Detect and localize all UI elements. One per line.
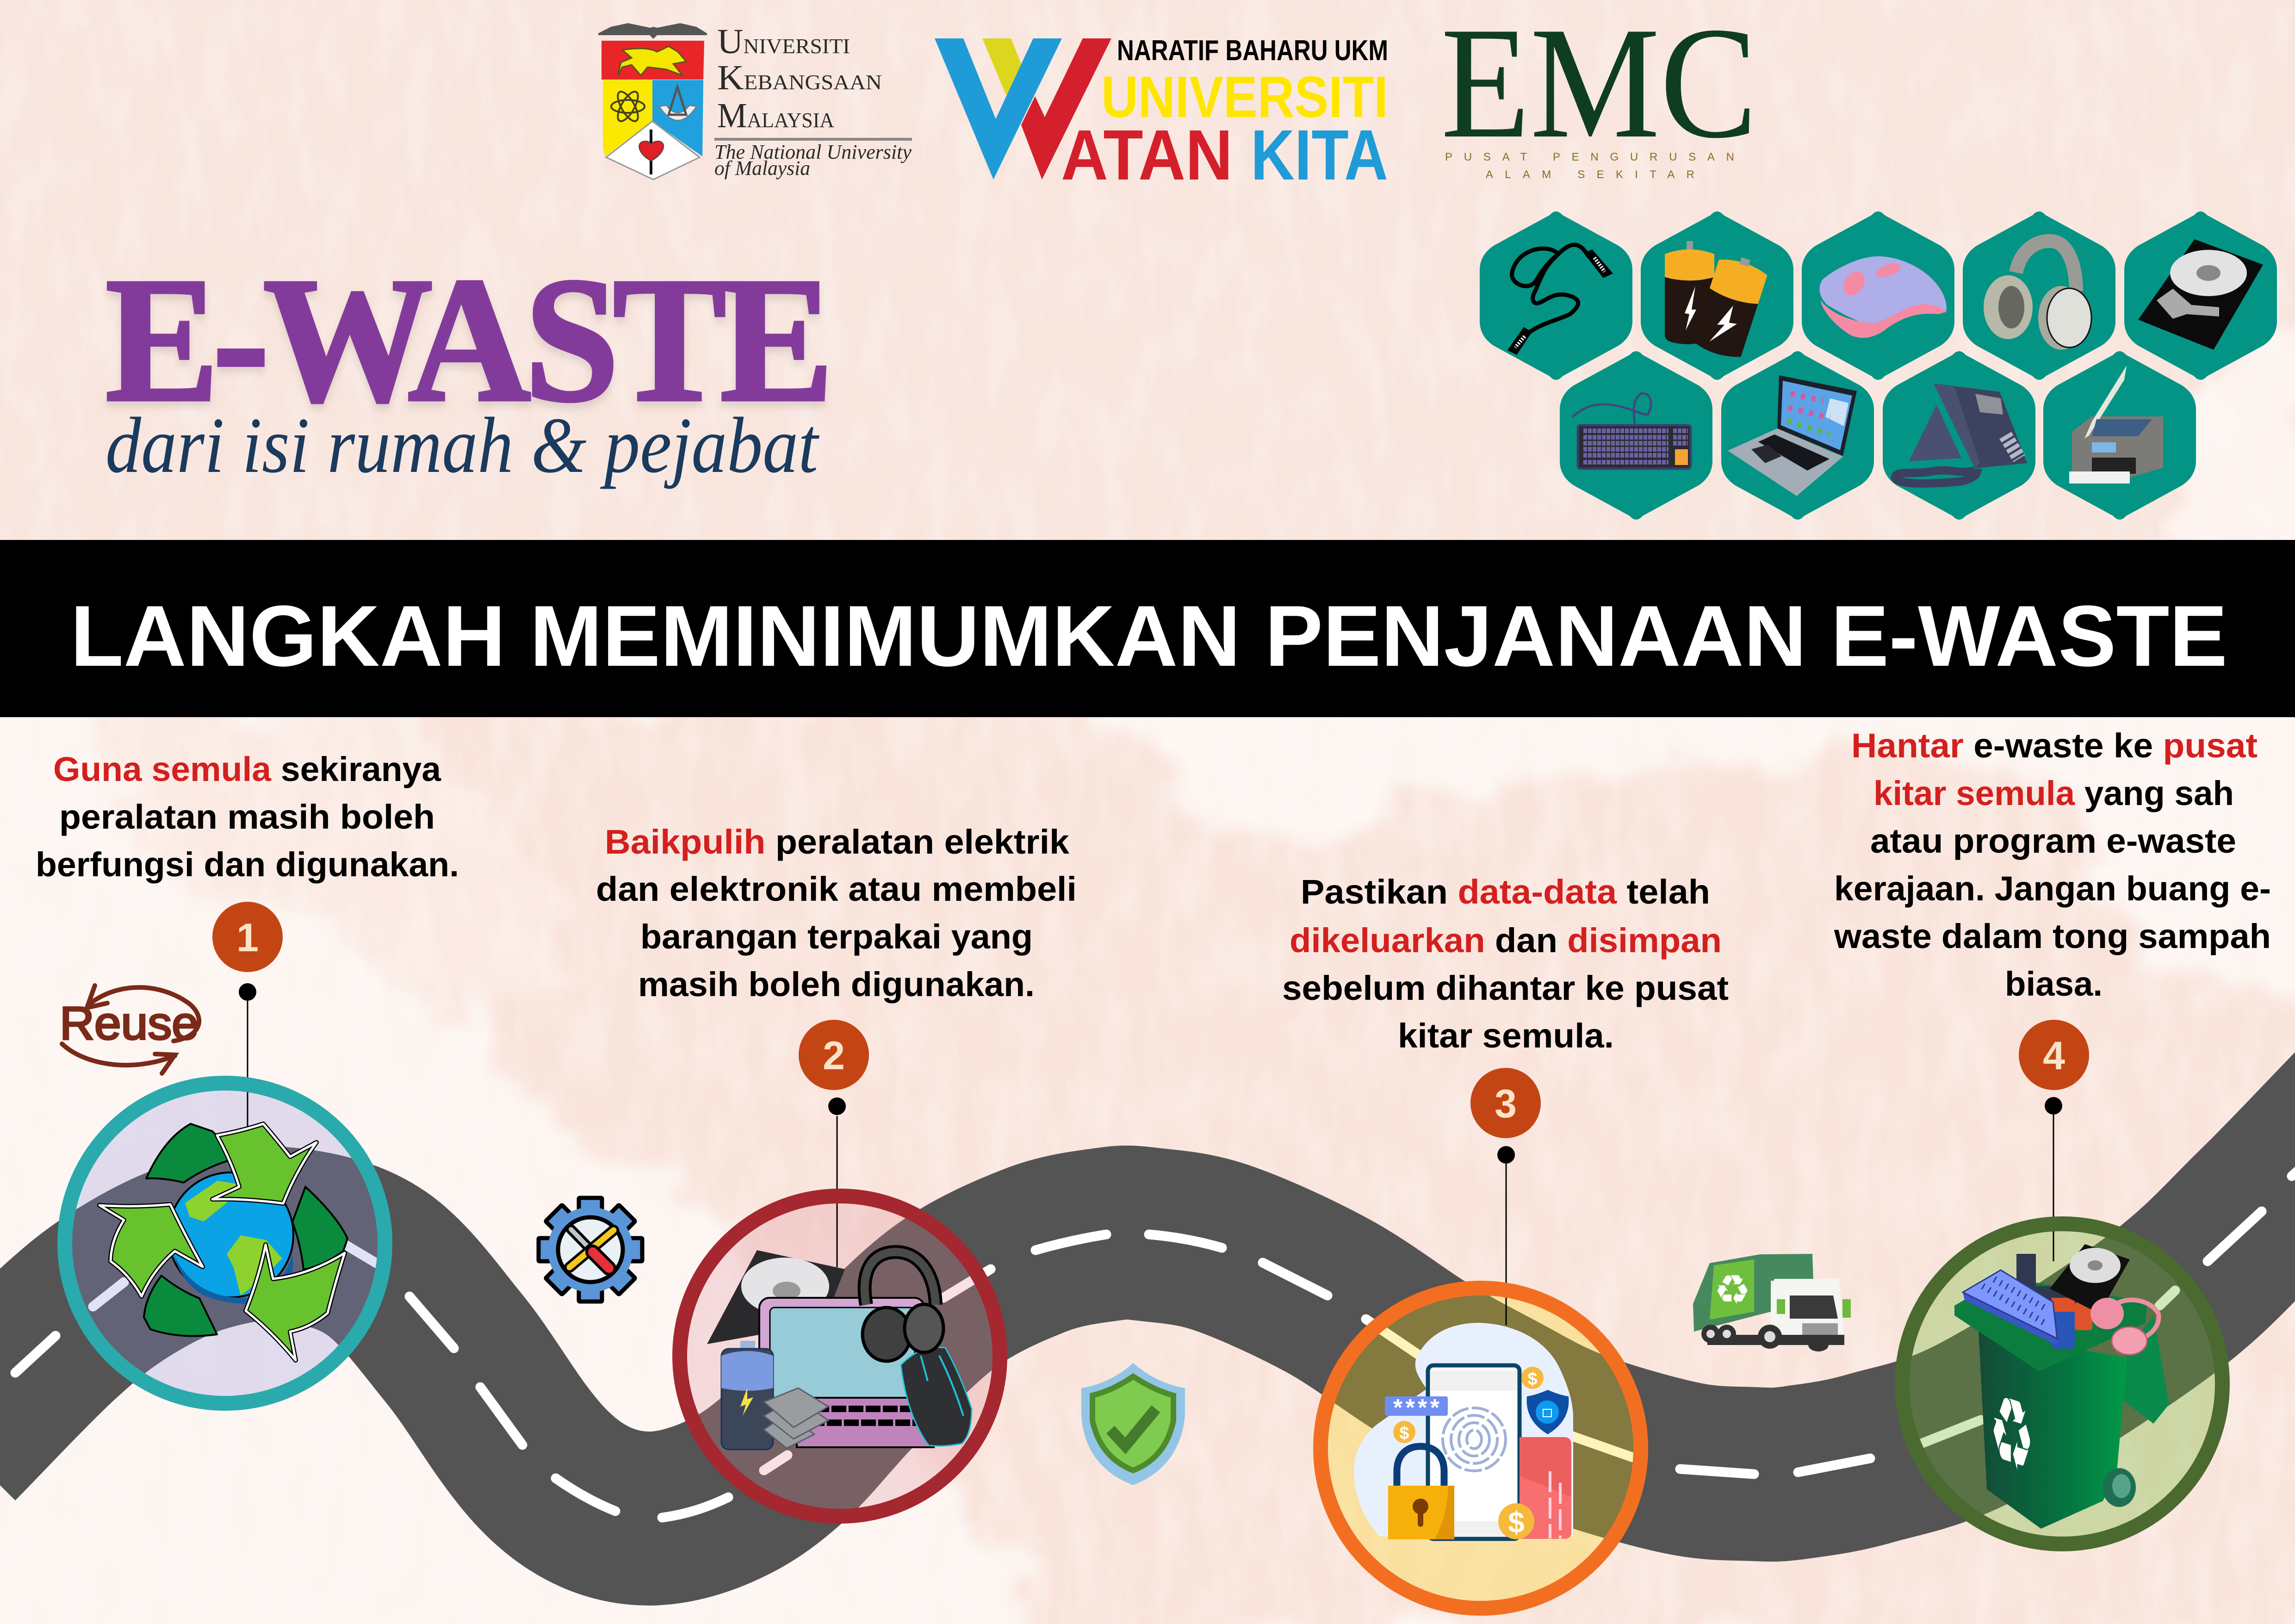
badge 3 (1470, 1068, 1541, 1138)
circle background (680, 1196, 1000, 1516)
logo: Wawasan Universiti Watan Kita: NARATIF BAHARU UKM (1117, 35, 1388, 67)
icon: battery (721, 1341, 773, 1450)
subtitle: dari isi rumah & pejabat: dari isi rumah & pejabat (105, 402, 820, 490)
icon: security shield (1527, 1390, 1569, 1434)
icon: garbage truck: ♻ (1714, 1266, 1750, 1314)
text block: step 2: masih boleh digunakan. (638, 965, 1035, 1004)
text block: step 4: atau program e-waste (1870, 822, 2236, 860)
circle background (1902, 1224, 2222, 1544)
icon: hard disk (707, 1250, 845, 1344)
logo: Wawasan Universiti Watan Kita: ATAN (1061, 115, 1233, 195)
badge 3: 3 (1495, 1082, 1517, 1126)
text block: step 4: biasa. (2005, 965, 2103, 1003)
pin dot (1497, 1146, 1515, 1164)
text block: step 2: dan elektronik atau membeli (596, 870, 1077, 908)
icon: hard disk (2050, 1244, 2130, 1314)
panel: step 3 data security circle (1321, 1068, 1641, 1608)
icon: password field: **** (1393, 1395, 1440, 1421)
panel: step 1 reuse circle (65, 902, 385, 1403)
logo: EMC Pusat Pengurusan Alam Sekitar: PUSAT PENGURUSAN (1445, 151, 1734, 163)
logo: UKM (598, 22, 912, 180)
icon: open book crest (598, 23, 707, 39)
text block: step 4: Hantar e-waste ke pusat (1851, 726, 2258, 765)
pin line (247, 1001, 248, 1127)
text block: step 3: dikeluarkan dan disimpan (1290, 921, 1722, 960)
text block: step 2: Baikpulih peralatan elektrik (605, 823, 1070, 861)
icon: garbage truck (1693, 1254, 1851, 1351)
icon: blue keyboard (1963, 1270, 2057, 1345)
text: Universiti Kebangsaan Malaysia: The National University (714, 141, 912, 163)
icon: laptop (759, 1298, 934, 1447)
text block: step 3: Pastikan data-data telah (1301, 873, 1710, 911)
badge 2 (799, 1020, 869, 1090)
text: Universiti Kebangsaan Malaysia (714, 22, 912, 180)
icon: UKM shield (602, 41, 704, 180)
text block: step 3 (1282, 873, 1729, 1055)
ring (680, 1196, 1000, 1516)
badge 4: 4 (2043, 1034, 2065, 1078)
icon: padlock (1388, 1446, 1454, 1539)
text block: step 1: peralatan masih boleh (59, 798, 435, 836)
icon: smartphone with fingerprint (1428, 1365, 1520, 1539)
icon: battery stack (764, 1388, 828, 1448)
pin dot (239, 983, 256, 1001)
logo: Wawasan Universiti Watan Kita: KITA (1251, 115, 1388, 195)
icon: computer mouse (1802, 211, 1954, 380)
panel: step 2 repair circle (680, 1020, 1000, 1516)
panel: e-waste hexagon icons (1480, 211, 2277, 520)
winding road (0, 1110, 2295, 1519)
circle background (65, 1083, 385, 1403)
text block: step 3: sebelum dihantar ke pusat (1282, 969, 1729, 1007)
icon: keyboard (1560, 351, 1712, 520)
icon: credit card (1520, 1437, 1571, 1539)
badge 1: 1 (236, 916, 259, 960)
icon: headphones (1963, 211, 2115, 380)
text block: step 1: berfungsi dan digunakan. (36, 845, 459, 884)
panel: step 4 recycling bin circle (1902, 1020, 2222, 1544)
ring (1902, 1224, 2222, 1544)
doodle: Reuse: Reuse (60, 998, 198, 1049)
icon: batteries (1641, 211, 1793, 380)
text block: step 4 (1834, 726, 2271, 1003)
badge 4 (2019, 1020, 2089, 1090)
text block: step 4: kerajaan. Jangan buang e- (1834, 869, 2271, 908)
badge 1 (212, 902, 283, 972)
title: E-WASTE: E-WASTE (105, 241, 827, 439)
pin line (1506, 1164, 1507, 1325)
icon: desk telephone (1883, 351, 2035, 520)
icon: wheelie bin: ♻ (1990, 1370, 2034, 1498)
icon: headphones (862, 1252, 943, 1361)
logo: EMC Pusat Pengurusan Alam Sekitar: ALAM SEKITAR (1486, 168, 1694, 181)
icon: pink headphones (2090, 1298, 2159, 1355)
pin dot (828, 1097, 846, 1115)
icon: printer scanner (2043, 351, 2196, 520)
title banner: LANGKAH MEMINIMUMKAN PENJANAAN E-WASTE (70, 588, 2227, 684)
icon: recycling earth (99, 1124, 347, 1360)
pin line (2053, 1115, 2054, 1261)
circle background (1321, 1288, 1641, 1608)
icon: gaming mouse (901, 1347, 972, 1446)
icon: gear with tools (539, 1198, 642, 1302)
pale backdrop blob (1354, 1323, 1573, 1536)
icon: batteries (2052, 1298, 2092, 1349)
logo: Wawasan Universiti Watan Kita: UNIVERSITI (1101, 64, 1388, 130)
icon: coins: $ (1399, 1424, 1409, 1443)
doodle: Reuse (60, 986, 199, 1073)
ring (1321, 1288, 1641, 1608)
icon: laptop (1721, 351, 1874, 520)
icon: wheelie bin (1954, 1277, 2169, 1529)
icon: coins: $ (1508, 1506, 1525, 1539)
icon: coins (1393, 1367, 1544, 1539)
icon: green security shield (1081, 1363, 1185, 1485)
icon: desk phone (2016, 1254, 2091, 1314)
title banner (0, 540, 2295, 717)
text block: step 3: kitar semula. (1398, 1017, 1614, 1055)
text block: step 4: kitar semula yang sah (1873, 774, 2234, 812)
text block: step 2 (596, 823, 1077, 1004)
pin dot (2045, 1097, 2062, 1115)
text: Universiti Kebangsaan Malaysia: of Malaysia (714, 157, 810, 180)
text: Universiti Kebangsaan Malaysia: KEBANGSAAN (717, 58, 882, 97)
icon: cable (1480, 211, 1632, 380)
icon: coins: $ (1527, 1370, 1538, 1389)
logo: Wawasan Universiti Watan Kita (935, 35, 1388, 195)
ring (65, 1083, 385, 1403)
badge 2: 2 (823, 1034, 845, 1078)
text block: step 4: waste dalam tong sampah (1834, 917, 2271, 955)
text block: step 2: barangan terpakai yang (640, 917, 1033, 956)
text block: step 1 (36, 750, 459, 884)
text block: step 1: Guna semula sekiranya (53, 750, 441, 788)
icon: hard disk (2124, 211, 2277, 380)
text: Universiti Kebangsaan Malaysia: UNIVERSITI (717, 22, 850, 61)
text: Universiti Kebangsaan Malaysia: MALAYSIA (717, 96, 834, 135)
